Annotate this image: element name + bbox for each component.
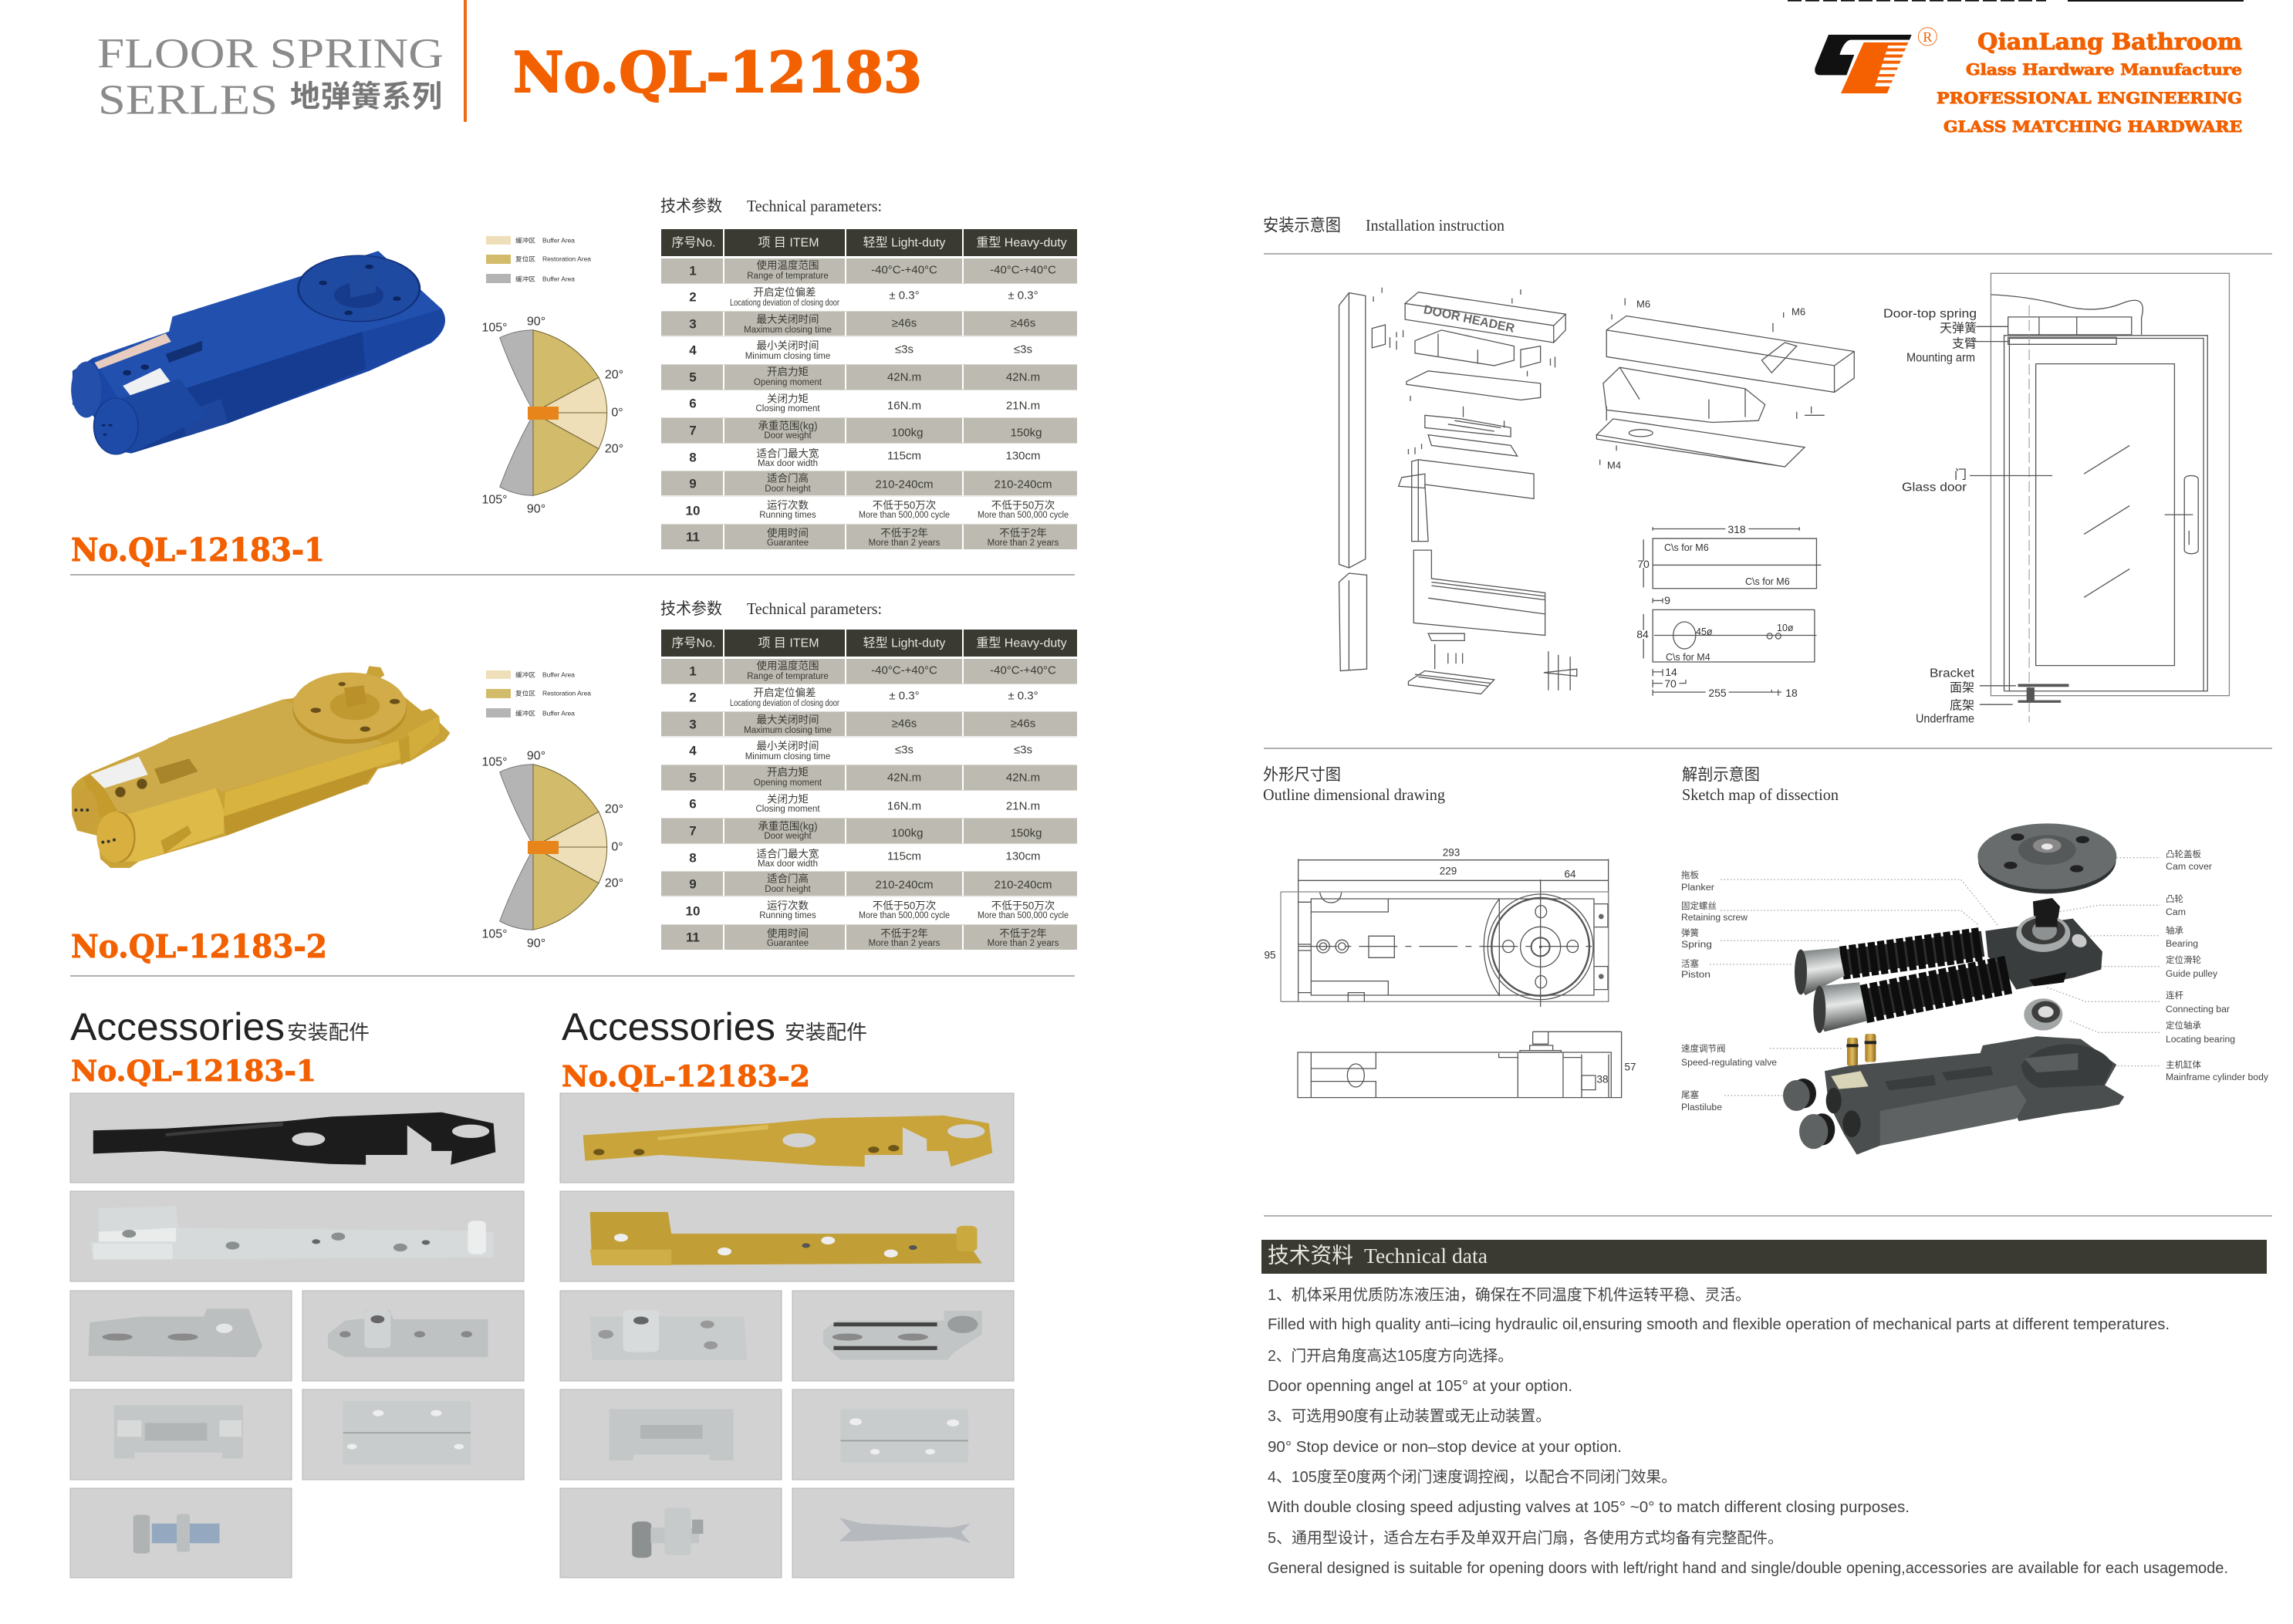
panel: technical parameters table 2: Technical parameters: <box>747 599 882 618</box>
icon: company logo <box>1815 28 1937 93</box>
legend: zones: 缓冲区 <box>515 236 535 244</box>
technical data band: Technical data <box>1364 1244 1488 1268</box>
panel: technical parameters table 1: 42N.m <box>887 370 921 384</box>
installation drawing dimension labels: M6 <box>1792 306 1805 318</box>
dissection labels: 主机缸体 <box>2166 1059 2201 1070</box>
outline drawing dimension labels <box>1264 847 1636 1085</box>
panel: technical parameters table 2: 8 <box>689 850 697 866</box>
door drawing labels: Door-top spring <box>1883 307 1977 321</box>
series title: FLOOR SPRING <box>97 29 444 77</box>
chart: door angle zones <box>481 315 623 515</box>
panel: technical parameters table 2: ± 0.3° <box>889 690 920 702</box>
door drawing labels: 支臂 <box>1952 336 1977 350</box>
installation drawing dimension labels <box>1423 298 1805 699</box>
panel: technical parameters table 1: ≥46s <box>892 316 917 330</box>
door elevation drawing <box>1970 273 2229 722</box>
dissection labels: Piston <box>1681 971 1710 980</box>
dissection labels: Mainframe cylinder body <box>2166 1073 2268 1082</box>
panel: technical parameters table 1: 210-240cm <box>875 478 934 491</box>
technical data text: 1、机体采用优质防冻液压油，确保在不同温度下机件运转平稳、灵活。 <box>1268 1286 1751 1304</box>
door drawing labels: 面架 <box>1950 680 1974 694</box>
panel: technical parameters table 2: Door height <box>765 885 812 894</box>
chart: door angle zones: 90° <box>527 503 545 515</box>
door drawing labels: 底架 <box>1950 699 1974 713</box>
product photo: gold floor spring <box>72 666 450 868</box>
dissection labels: Plastilube <box>1681 1103 1722 1112</box>
installation heading: Installation instruction <box>1366 216 1504 235</box>
technical data text: 4、105度至0度两个闭门速度调控阀，以配合不同闭门效果。 <box>1268 1468 1677 1486</box>
panel: technical parameters table 1: 6 <box>689 397 697 410</box>
chart: door angle zones: 0° <box>611 406 623 420</box>
panel: technical parameters table 1: More than 500,000 cycle <box>859 511 950 520</box>
dissection labels: Bearing <box>2166 940 2198 949</box>
dissection photo: spring and body parts <box>1783 823 2124 1155</box>
dissection labels: Retaining screw <box>1681 913 1748 923</box>
panel: technical parameters table 2: More than 500,000 cycle <box>978 911 1069 920</box>
chart: door angle zones (second product) <box>481 750 623 950</box>
panel: technical parameters table 2: 适合门高 <box>767 872 809 884</box>
panel: technical parameters table 2: 2 <box>689 690 697 705</box>
panel: technical parameters table 2: 开启力矩 <box>767 767 809 778</box>
accessories heading left: Accessories <box>70 1005 285 1048</box>
outline drawing dimension labels: 293 <box>1443 847 1460 858</box>
series title: 地弹簧系列 <box>290 80 442 114</box>
chart: door angle zones (second product): 90° <box>527 937 545 950</box>
panel: technical parameters table 1: 不低于2年 <box>880 528 928 539</box>
panel: technical parameters table 2: Minimum closing time <box>745 752 830 761</box>
icon: plastilube end caps <box>1783 1079 1835 1149</box>
panel: technical parameters table 2: 7 <box>689 824 697 838</box>
door drawing labels: Underframe <box>1916 713 1974 725</box>
legend: zones <box>486 236 592 283</box>
panel: technical parameters table 1: 轻型 Light-duty <box>863 236 945 250</box>
model label 2: No.QL-12183-2 <box>71 928 327 965</box>
chart: door angle zones: 20° <box>605 443 623 455</box>
accessory parts: gold and silver set <box>583 1116 992 1558</box>
legend: zones: Restoration Area <box>542 256 592 262</box>
panel: technical parameters table 2: 技术参数 <box>660 599 722 618</box>
panel: technical parameters table 1: 开启定位偏差 <box>753 287 816 298</box>
accessory parts: silver and black set <box>89 1112 495 1554</box>
outline drawing dimension labels: 38 <box>1596 1074 1609 1085</box>
technical data text: Door openning angel at 105° at your option. <box>1268 1378 1572 1395</box>
model number heading: No.QL-12183 <box>513 39 922 105</box>
panel: technical parameters table 1: Running times <box>759 511 816 520</box>
panel: technical parameters table 1: 150kg <box>1011 426 1042 440</box>
panel: technical parameters table 1: 最小关闭时间 <box>756 339 819 352</box>
panel: technical parameters table 2: 项 目 ITEM <box>758 637 819 650</box>
panel: technical parameters table 2: Running times <box>759 911 816 920</box>
dissection labels: Locating bearing <box>2166 1035 2235 1045</box>
panel: technical parameters table 1: Locationg deviation of closing door <box>730 299 839 308</box>
panel: technical parameters table 1: 100kg <box>892 426 923 440</box>
panel: technical parameters table 1: 3 <box>689 316 697 332</box>
chart: door angle zones (second product): 20° <box>605 876 623 890</box>
panel: technical parameters table 2: 序号No. <box>672 636 715 650</box>
dissection labels: 活塞 <box>1681 958 1699 969</box>
panel: technical parameters table 1: 不低于50万次 <box>991 500 1055 511</box>
panel: technical parameters table 2: Door weight <box>764 832 812 841</box>
installation drawing dimension labels: 318 <box>1727 523 1746 535</box>
installation drawing dimension labels: DOOR HEADER <box>1423 303 1516 336</box>
chart: door angle zones (second product): 0° <box>611 841 623 853</box>
chart: door angle zones (second product): 90° <box>527 750 545 762</box>
panel: technical parameters table 1: 130cm <box>1005 449 1041 463</box>
technical data text: General designed is suitable for opening doors with left/right hand and single/double opening,accessories are available for each usagemode. <box>1268 1560 2228 1577</box>
panel: technical parameters table 2: 重型 Heavy-duty <box>976 636 1067 650</box>
panel: technical parameters table 1: 项 目 ITEM <box>758 236 819 250</box>
panel: technical parameters table 1: 210-240cm <box>994 478 1052 491</box>
legend: zones (second product): Restoration Area <box>542 690 592 697</box>
panel: technical parameters table 1: 承重范围(kg) <box>758 420 818 432</box>
panel: technical parameters table 1: 不低于2年 <box>999 528 1047 539</box>
panel: technical parameters table 1: 适合门高 <box>767 472 809 484</box>
chart: door angle zones: 90° <box>527 315 545 329</box>
panel: technical parameters table 1: 10 <box>686 503 700 518</box>
panel: technical parameters table 1: 115cm <box>887 449 921 463</box>
panel: technical parameters table 2: Range of temprature <box>747 672 829 681</box>
panel: technical parameters table 1: 21N.m <box>1006 400 1040 412</box>
outline drawing dimension labels: 57 <box>1624 1062 1636 1072</box>
company text: PROFESSIONAL ENGINEERING <box>1937 89 2242 107</box>
door drawing labels: Mounting arm <box>1906 352 1975 364</box>
accessories heading right: No.QL-12183-2 <box>562 1059 810 1093</box>
dissection labels: Cam <box>2166 908 2186 917</box>
panel: technical parameters table 2: More than 2 years <box>869 939 941 948</box>
panel: technical parameters table 1: -40°C-+40°C <box>871 264 937 276</box>
panel: technical parameters table 2: -40°C-+40°C <box>990 663 1056 677</box>
panel: technical parameters table 2: Max door width <box>758 859 818 869</box>
panel: technical parameters table 2: 210-240cm <box>875 878 934 892</box>
panel: technical parameters table 1: 适合门最大宽 <box>756 447 819 460</box>
panel: technical parameters table 1: 11 <box>686 529 700 545</box>
panel: technical parameters table 2: ± 0.3° <box>1008 690 1038 702</box>
icon: mounting plate and bearing <box>1985 898 2102 990</box>
door drawing labels <box>1883 307 1977 725</box>
exploded installation drawing <box>1339 288 1854 696</box>
installation drawing dimension labels: M6 <box>1636 298 1650 310</box>
company text: GLASS MATCHING HARDWARE <box>1943 117 2242 136</box>
panel: technical parameters table 1: 序号No. <box>672 236 715 250</box>
installation drawing dimension labels: 70 <box>1664 677 1677 690</box>
company text: Glass Hardware Manufacture <box>1966 60 2242 79</box>
icon: locating bearing <box>2024 998 2062 1031</box>
panel: technical parameters table 1: Closing moment <box>755 404 820 414</box>
series title <box>97 29 444 123</box>
installation drawing dimension labels: C\s for M6 <box>1664 542 1709 553</box>
accessories heading left: No.QL-12183-1 <box>71 1054 316 1088</box>
dissection heading: 解剖示意图 <box>1682 765 1760 784</box>
dissection labels: 凸轮盖板 <box>2166 849 2201 859</box>
panel: technical parameters table 2: ≥46s <box>1011 717 1035 730</box>
accessories heading right <box>562 1005 867 1093</box>
panel: technical parameters table 2: ≤3s <box>1014 744 1032 756</box>
panel: technical parameters table 1: 开启力矩 <box>767 366 809 378</box>
panel: technical parameters table 2: 4 <box>689 744 697 758</box>
legend: zones (second product): Buffer Area <box>542 671 576 679</box>
dissection labels <box>1681 849 2268 1112</box>
panel: technical parameters table 1: 5 <box>689 370 697 384</box>
dissection labels: 定位轴承 <box>2166 1020 2201 1031</box>
panel: technical parameters table 2: Maximum closing time <box>744 726 832 735</box>
panel: technical parameters table 2: 6 <box>689 796 697 812</box>
outline drawing heading <box>1263 765 1445 804</box>
panel: technical parameters table 2: 42N.m <box>887 771 921 784</box>
panel: technical parameters table 1: 重型 Heavy-duty <box>976 236 1067 250</box>
panel: technical parameters table 2: 最大关闭时间 <box>756 714 819 725</box>
installation drawing dimension labels: 70 <box>1637 558 1650 570</box>
dissection labels: Planker <box>1681 883 1714 893</box>
door drawing labels: 天弹簧 <box>1940 321 1977 335</box>
dissection labels: 速度调节阀 <box>1681 1043 1725 1054</box>
accessories heading left <box>70 1005 370 1088</box>
panel: technical parameters table 1: 使用温度范围 <box>756 259 819 272</box>
technical data band: 技术资料 <box>1268 1244 1353 1268</box>
installation heading <box>1263 216 1504 235</box>
panel: technical parameters table 2: 210-240cm <box>994 878 1052 892</box>
panel: technical parameters table 2: 11 <box>686 930 700 944</box>
panel: technical parameters table 1: Max door width <box>758 459 818 468</box>
door drawing labels: Glass door <box>1902 481 1967 494</box>
clipped black strip at the top edge <box>1788 0 2244 2</box>
icon: cam cover <box>1977 823 2116 893</box>
dissection labels: Speed-regulating valve <box>1681 1058 1777 1068</box>
panel: technical parameters table 2: 21N.m <box>1006 799 1040 813</box>
outline drawing dimension labels: 64 <box>1564 869 1576 880</box>
panel: technical parameters table 2: Guarantee <box>767 939 809 948</box>
installation drawing dimension labels: C\s for M6 <box>1745 576 1790 587</box>
chart: door angle zones: 105° <box>481 321 508 335</box>
dissection labels: 凸轮 <box>2166 893 2183 904</box>
panel: technical parameters table 2: ≥46s <box>892 717 917 730</box>
header divider <box>464 0 467 122</box>
panel: technical parameters table 2: 42N.m <box>1006 771 1040 784</box>
panel: technical parameters table 2: 不低于50万次 <box>991 900 1055 912</box>
installation heading: 安装示意图 <box>1263 216 1341 235</box>
series title: SERLES <box>98 76 278 123</box>
company text: QianLang Bathroom <box>1977 29 2242 55</box>
panel: technical parameters table 2: 150kg <box>1011 827 1042 839</box>
panel: technical parameters table 2: 使用时间 <box>767 927 809 940</box>
outline drawing dimension labels: 229 <box>1440 866 1457 876</box>
legend: zones: Buffer Area <box>542 276 576 282</box>
panel: technical parameters table 2: Closing moment <box>755 805 820 814</box>
panel: technical parameters table 1: Maximum closing time <box>744 326 832 335</box>
panel: technical parameters table 1: Opening moment <box>754 378 822 387</box>
panel: technical parameters table 2: 5 <box>689 770 697 785</box>
legend: zones (second product) <box>486 670 592 717</box>
outline drawing dimension labels: 95 <box>1264 949 1276 961</box>
dissection labels: 轴承 <box>2166 925 2183 936</box>
outline drawing heading: 外形尺寸图 <box>1263 765 1341 784</box>
panel: technical parameters table 1: 4 <box>689 343 697 358</box>
panel: technical parameters table 2: 轻型 Light-duty <box>863 636 945 650</box>
panel: technical parameters table 1: Guarantee <box>767 539 809 548</box>
door drawing labels: Bracket <box>1930 667 1975 680</box>
dissection labels: 固定螺丝 <box>1681 900 1717 911</box>
dissection labels: Cam cover <box>2166 863 2212 872</box>
legend: zones (second product): 缓冲区 <box>515 671 535 679</box>
panel: technical parameters table 1: ± 0.3° <box>1008 289 1038 302</box>
technical data text: 90° Stop device or non–stop device at your option. <box>1268 1439 1622 1456</box>
panel: technical parameters table 1: 16N.m <box>887 400 921 412</box>
panel: technical parameters table 2: 1 <box>689 663 697 679</box>
panel: technical parameters table 1: ≤3s <box>895 343 913 356</box>
installation drawing dimension labels: 14 <box>1665 666 1677 678</box>
panel: technical parameters table 2: 承重范围(kg) <box>758 821 818 832</box>
panel: technical parameters table 2: 9 <box>689 876 697 892</box>
panel: technical parameters table 2: Opening moment <box>754 778 822 788</box>
panel: technical parameters table 1: -40°C-+40°C <box>990 264 1056 276</box>
dissection labels: Connecting bar <box>2166 1005 2230 1015</box>
panel: technical parameters table 1: ± 0.3° <box>889 289 920 302</box>
technical data text: With double closing speed adjusting valves at 105° ~0° to match different closing purposes. <box>1268 1499 1910 1516</box>
panel: technical parameters table 1: 42N.m <box>1006 370 1040 384</box>
panel: technical parameters table 2: ≤3s <box>895 744 913 756</box>
panel: technical parameters table 1: Door weight <box>764 431 812 441</box>
panel: technical parameters table 2: 最小关闭时间 <box>756 741 819 751</box>
chart: door angle zones: 20° <box>605 369 623 381</box>
panel: technical parameters table 1: 不低于50万次 <box>873 500 936 511</box>
technical data text: 2、门开启角度高达105度方向选择。 <box>1268 1347 1513 1365</box>
installation drawing dimension labels: 10ø <box>1777 623 1794 633</box>
panel: technical parameters table 2: 3 <box>689 717 697 731</box>
accessories heading left: 安装配件 <box>287 1021 370 1044</box>
dissection labels: 拖板 <box>1681 869 1699 880</box>
installation drawing dimension labels: 45ø <box>1696 626 1713 637</box>
panel: technical parameters table 2: 开启定位偏差 <box>753 687 816 699</box>
panel: technical parameters table 2: 运行次数 <box>767 900 809 912</box>
dissection labels: Spring <box>1681 940 1712 950</box>
installation drawing dimension labels: 255 <box>1708 687 1727 699</box>
panel: technical parameters table 1: Technical parameters: <box>747 197 882 215</box>
panel: technical parameters table 2 <box>660 599 1077 950</box>
panel: technical parameters table 1 <box>660 197 1077 549</box>
panel: technical parameters table 1: 9 <box>689 477 697 491</box>
technical data text: Filled with high quality anti–icing hydraulic oil,ensuring smooth and flexible operation of mechanical parts at different temperatures. <box>1268 1316 2170 1333</box>
panel: technical parameters table 2: More than 2 years <box>988 939 1059 948</box>
dissection labels: 弹簧 <box>1681 927 1699 938</box>
chart: door angle zones (second product): 105° <box>481 756 508 768</box>
outline dimensional drawing <box>1281 859 1622 1098</box>
panel: technical parameters table 2: 不低于2年 <box>999 927 1047 940</box>
product photo: blue floor spring <box>71 251 445 454</box>
installation drawing dimension labels: M4 <box>1607 460 1621 471</box>
panel: technical parameters table 1: 使用时间 <box>767 526 809 539</box>
icon: springs and pistons <box>1795 944 2008 1033</box>
panel: technical parameters table 1: More than 500,000 cycle <box>978 511 1069 520</box>
legend: zones (second product): 复位区 <box>515 690 535 697</box>
panel: technical parameters table 2: 不低于2年 <box>880 927 928 940</box>
panel: technical parameters table 1: More than 2 years <box>988 539 1059 548</box>
panel: accessory photo tiles <box>70 1093 1014 1578</box>
dissection labels: Guide pulley <box>2166 970 2217 979</box>
panel: technical parameters table 1: 关闭力矩 <box>767 393 809 404</box>
installation drawing dimension labels: 9 <box>1664 594 1670 606</box>
accessories heading right: Accessories <box>562 1005 775 1048</box>
panel: technical parameters table 2: More than 500,000 cycle <box>859 911 950 920</box>
dissection heading <box>1682 765 1839 804</box>
chart: door angle zones (second product): 20° <box>605 802 623 816</box>
panel: technical parameters table 2: -40°C-+40°C <box>871 663 937 677</box>
icon: company logo: R <box>1923 29 1932 45</box>
accessories heading right: 安装配件 <box>785 1021 867 1044</box>
panel: technical parameters table 2: 适合门最大宽 <box>756 847 819 859</box>
panel: technical parameters table 1: 8 <box>689 451 697 464</box>
technical data text: 5、通用型设计，适合左右手及单双开启门扇，各使用方式均备有完整配件。 <box>1268 1529 1783 1547</box>
panel: technical parameters table 1: Minimum closing time <box>745 352 830 361</box>
dissection leader lines <box>1710 858 2160 1096</box>
legend: zones (second product): 缓冲区 <box>515 710 535 717</box>
panel: technical parameters table 1: Range of temprature <box>747 272 829 281</box>
dissection labels: 连杆 <box>2166 990 2183 1001</box>
dissection heading: Sketch map of dissection <box>1682 785 1839 804</box>
panel: technical parameters table 2: 使用温度范围 <box>756 659 819 671</box>
panel: technical parameters table 2: 16N.m <box>887 799 921 813</box>
technical data text: 3、可选用90度有止动装置或无止动装置。 <box>1268 1407 1551 1425</box>
dissection labels: 尾塞 <box>1681 1089 1699 1100</box>
panel: technical parameters table 1: More than 2 years <box>869 539 941 548</box>
panel: technical parameters table 2: 10 <box>686 904 700 918</box>
panel: technical parameters table 2: 关闭力矩 <box>767 793 809 805</box>
panel: technical parameters table 2: 130cm <box>1005 850 1041 863</box>
dissection labels: 定位滑轮 <box>2166 954 2201 965</box>
panel: technical parameters table 1: ≤3s <box>1014 343 1032 356</box>
panel: technical parameters table 1: ≥46s <box>1011 316 1035 330</box>
panel: technical parameters table 1: 7 <box>689 423 697 438</box>
door drawing labels: 门 <box>1954 468 1967 481</box>
icon: speed valves <box>1846 1034 1876 1066</box>
legend: zones (second product): Buffer Area <box>542 710 576 717</box>
icon: main cylinder body <box>1825 1036 2124 1155</box>
model label 1: No.QL-12183-1 <box>71 532 325 569</box>
panel: technical parameters table 1: Door height <box>765 484 812 494</box>
panel: technical parameters table 1: 技术参数 <box>660 197 722 215</box>
panel: technical parameters table 1: 最大关闭时间 <box>756 313 819 326</box>
legend: zones: Buffer Area <box>542 238 576 244</box>
panel: technical parameters table 2: 不低于50万次 <box>873 900 936 912</box>
legend: zones: 复位区 <box>515 255 535 262</box>
panel: technical parameters table 1: 2 <box>689 290 697 304</box>
installation drawing dimension labels: 84 <box>1636 628 1649 640</box>
panel: technical parameters table 1: 运行次数 <box>767 500 809 511</box>
legend: zones: 缓冲区 <box>515 275 535 282</box>
chart: door angle zones (second product): 105° <box>481 927 508 941</box>
technical data band <box>1261 1240 2267 1274</box>
technical data text <box>1268 1286 2228 1577</box>
panel: technical parameters table 2: 100kg <box>892 827 923 839</box>
outline drawing heading: Outline dimensional drawing <box>1263 785 1445 804</box>
installation drawing dimension labels: 18 <box>1785 687 1798 699</box>
panel: technical parameters table 2: 115cm <box>887 850 921 863</box>
chart: door angle zones: 105° <box>481 494 508 506</box>
company text <box>1937 29 2242 136</box>
panel: technical parameters table 2: Locationg deviation of closing door <box>730 699 839 708</box>
panel: technical parameters table 1: 1 <box>689 264 697 278</box>
installation drawing dimension labels: C\s for M4 <box>1666 652 1710 663</box>
